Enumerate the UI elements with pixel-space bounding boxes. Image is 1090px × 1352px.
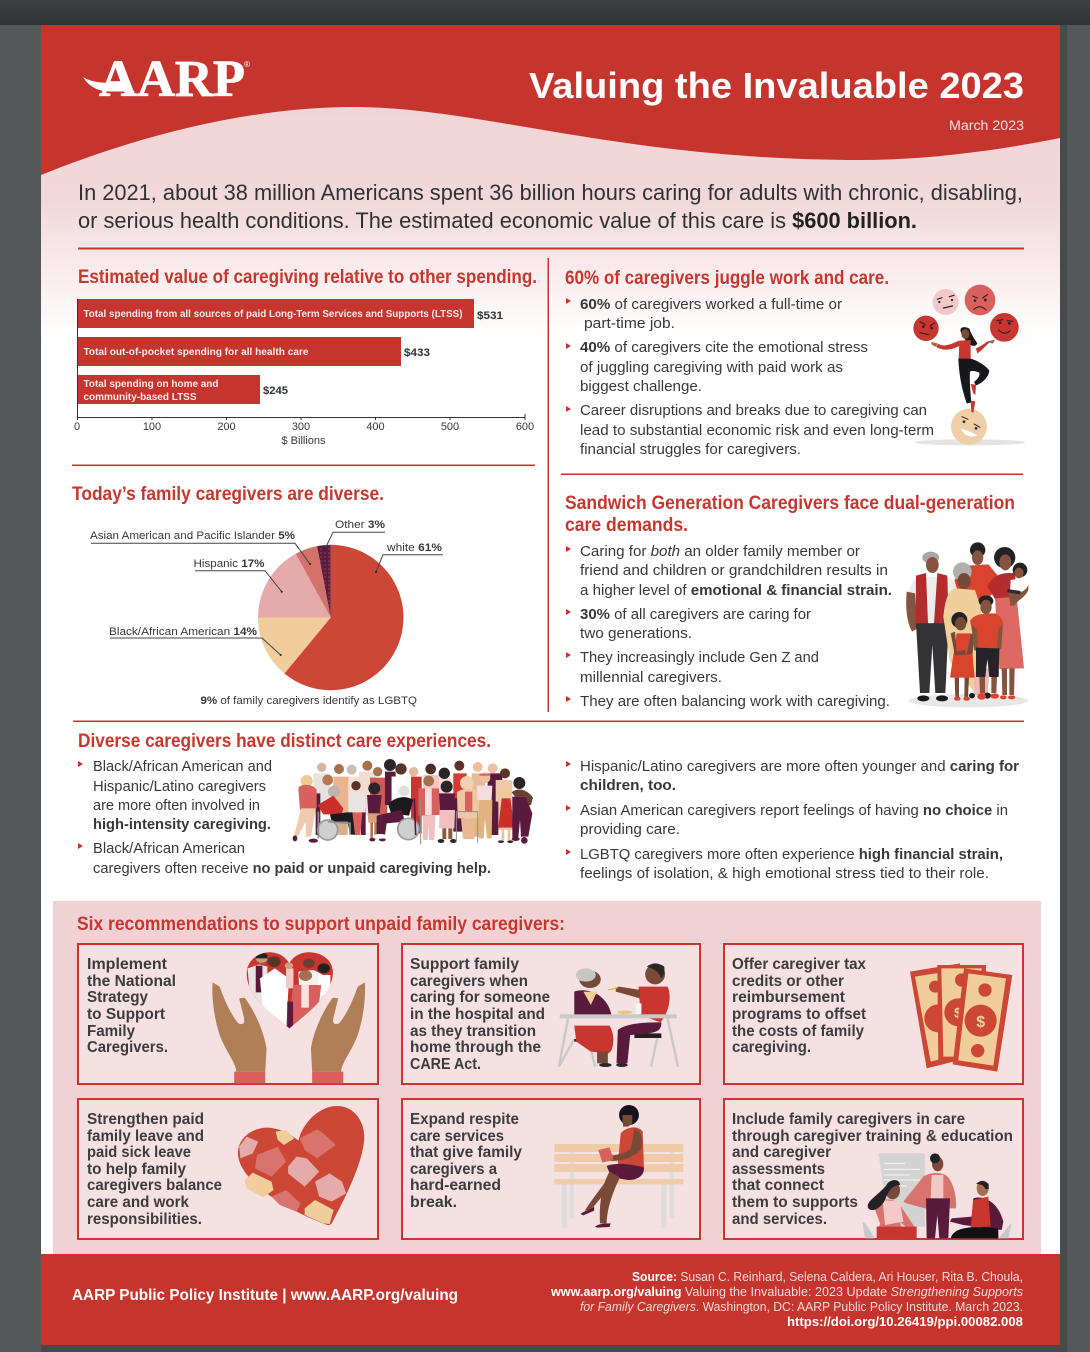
bar chart: $ Billions xyxy=(281,435,326,447)
bullets: sandwich generation: They increasingly include Gen Z and xyxy=(580,649,819,666)
footer xyxy=(41,1254,1060,1345)
card text: respite care: break. xyxy=(410,1194,457,1211)
heading: recommendations: Six recommendations to support unpaid family caregivers: xyxy=(77,914,565,935)
AARP logo: ® xyxy=(244,60,250,69)
bullets: right column: providing care. xyxy=(580,821,680,838)
pie labels: Hispanic 17% xyxy=(194,558,265,570)
heading: care experiences: Diverse caregivers have distinct care experiences. xyxy=(78,731,491,752)
card text: training and education: them to supports xyxy=(732,1194,858,1211)
LGBTQ note: 9% of family caregivers identify as LGBTQ xyxy=(200,695,417,707)
card text: training and education: and caregiver xyxy=(732,1144,831,1161)
bullets: sandwich generation: two generations. xyxy=(580,625,692,642)
card text: hospital transition: caring for someone xyxy=(410,989,550,1006)
card text: national strategy: Implement xyxy=(87,956,167,973)
intro text: In 2021, about 38 million Americans spent 36 billion hours caring for adults with chronic, disabling, xyxy=(78,180,1023,205)
heading: diversity: Today’s family caregivers are diverse. xyxy=(72,484,384,505)
bullets: sandwich generation: millennial caregivers. xyxy=(580,669,722,686)
intro text xyxy=(78,180,1023,233)
card text: national strategy: to Support xyxy=(87,1006,165,1023)
bullets: juggling: 60% of caregivers worked a full-time or xyxy=(580,296,842,313)
card text: hospital transition: in the hospital and xyxy=(410,1006,545,1023)
card text: hospital transition xyxy=(410,956,550,1073)
card: national strategy xyxy=(78,944,378,1084)
footer organisation and link: AARP Public Policy Institute | www.AARP.org/valuing xyxy=(72,1287,458,1304)
card text: paid leave: family leave and xyxy=(87,1128,204,1145)
card text: hospital transition: Support family xyxy=(410,956,519,973)
pie chart xyxy=(90,519,443,690)
card text: training and education: and services. xyxy=(732,1211,827,1228)
bullets: juggling: of juggling caregiving with paid work as xyxy=(580,359,843,376)
panel: sandwich generation xyxy=(565,493,1028,710)
illustration: caregiver feeding older woman at table xyxy=(559,963,678,1067)
card text: respite care: hard-earned xyxy=(410,1177,501,1194)
bullets: juggling xyxy=(566,296,934,458)
date: March 2023 xyxy=(949,118,1024,133)
bullets: right column xyxy=(566,758,1019,882)
bullets: right column: Asian American caregivers report feelings of having no choice in xyxy=(580,802,1008,819)
heading: sandwich generation: care demands. xyxy=(565,515,688,536)
card text: training and education: that connect xyxy=(732,1177,824,1194)
pie labels: Other 3% xyxy=(335,519,385,531)
card text: training and education: Include family caregivers in care xyxy=(732,1111,965,1128)
source citation: www.aarp.org/valuing Valuing the Invaluable: 2023 Update Strengthening Supports xyxy=(550,1285,1023,1299)
bullets: left column: Black/African American xyxy=(93,840,245,857)
bullets: sandwich generation: Caring for both an older family member or xyxy=(580,543,860,560)
bar chart: 500 xyxy=(441,421,459,433)
bar chart: $433 xyxy=(404,347,430,359)
bullets: left column: high-intensity caregiving. xyxy=(93,816,271,833)
card text: paid leave: Strengthen paid xyxy=(87,1111,204,1128)
intro text: or serious health conditions. The estimated economic value of this care is $600 billion. xyxy=(78,208,917,233)
bullets: sandwich generation: friend and children or grandchildren results in xyxy=(580,562,888,579)
illustration: woman juggling emotions xyxy=(913,285,1025,445)
panel: spending bar chart xyxy=(74,267,537,447)
bullets: juggling: financial struggles for caregivers. xyxy=(580,441,801,458)
source citation: Source: Susan C. Reinhard, Selena Caldera, Ari Houser, Rita B. Choula, xyxy=(632,1270,1023,1284)
panel: distinct care experiences xyxy=(78,731,1019,882)
bullets: juggling: 40% of caregivers cite the emotional stress xyxy=(580,339,868,356)
card text: training and education: through caregiver training & education xyxy=(732,1128,1013,1145)
bullets: juggling: lead to substantial economic risk and even long-term xyxy=(580,422,934,439)
card: tax credits xyxy=(724,944,1023,1084)
card text: paid leave: to help family xyxy=(87,1161,186,1178)
card text: hospital transition: CARE Act. xyxy=(410,1056,481,1073)
bar chart: 400 xyxy=(366,421,385,433)
bullets: left column: are more often involved in xyxy=(93,797,260,814)
illustration: hands holding heart of people xyxy=(212,950,365,1083)
bullets: sandwich generation: 30% of all caregivers are caring for xyxy=(580,606,811,623)
bullets: juggling: Career disruptions and breaks due to caregiving can xyxy=(580,402,927,419)
card text: respite care: Expand respite xyxy=(410,1111,519,1128)
bullets: sandwich generation: They are often balancing work with caregiving. xyxy=(580,693,890,710)
card text: national strategy xyxy=(87,956,176,1056)
bullets: right column: feelings of isolation, & high emotional stress tied to their role. xyxy=(580,865,989,882)
card text: paid leave: paid sick leave xyxy=(87,1144,191,1161)
bar chart: 200 xyxy=(217,421,236,433)
card text: tax credits: Offer caregiver tax xyxy=(732,956,866,973)
illustration: banknotes: $ xyxy=(954,1005,962,1021)
bar chart: Total out-of-pocket spending for all health care xyxy=(84,347,309,358)
panel: diversity pie chart xyxy=(72,484,443,707)
card text: national strategy: Strategy xyxy=(87,989,148,1006)
bar chart: community-based LTSS xyxy=(84,392,197,403)
bullets: left column: Hispanic/Latino caregivers xyxy=(93,778,266,795)
pie labels: Black/African American 14% xyxy=(109,626,257,638)
bar chart: 600 xyxy=(516,421,534,433)
card text: paid leave: caregivers balance xyxy=(87,1177,222,1194)
card text: respite care: care services xyxy=(410,1128,504,1145)
card text: training and education xyxy=(732,1111,1013,1228)
card text: tax credits: reimbursement xyxy=(732,989,845,1006)
source citation: for Family Caregivers. Washington, DC: AARP Public Policy Institute. March 2023. xyxy=(580,1300,1023,1314)
card text: respite care xyxy=(410,1111,522,1211)
bar chart xyxy=(74,299,534,447)
card text: training and education: assessments xyxy=(732,1161,825,1178)
card text: hospital transition: caregivers when xyxy=(410,973,528,990)
bullets: juggling: part-time job. xyxy=(584,315,675,332)
panel: six recommendations xyxy=(53,901,1041,1254)
card text: national strategy: Family xyxy=(87,1023,135,1040)
bar chart: Total spending on home and xyxy=(84,379,218,390)
bar chart: $245 xyxy=(263,385,288,397)
source citation: https://doi.org/10.26419/ppi.00082.008 xyxy=(787,1315,1023,1329)
card text: tax credits xyxy=(732,956,866,1056)
illustration: banknotes xyxy=(910,963,1012,1072)
heading: sandwich generation xyxy=(565,493,1015,536)
panel: juggling work and care xyxy=(565,268,1025,458)
card: respite care xyxy=(402,1099,700,1239)
bar chart: 100 xyxy=(143,421,161,433)
card text: hospital transition: as they transition xyxy=(410,1023,536,1040)
bullets: right column: children, too. xyxy=(580,777,676,794)
illustration: woman reading on bench xyxy=(554,1105,683,1228)
bullets: juggling: biggest challenge. xyxy=(580,378,702,395)
heading: spending: Estimated value of caregiving relative to other spending. xyxy=(78,267,537,288)
bullets: right column: Hispanic/Latino caregivers are more often younger and caring for xyxy=(580,758,1019,775)
header banner xyxy=(41,25,1060,175)
card text: tax credits: credits or other xyxy=(732,973,844,990)
bullets: left column xyxy=(78,758,491,877)
bullets: right column: LGBTQ caregivers more often experience high financial strain, xyxy=(580,846,1003,863)
bullets: left column: caregivers often receive no paid or unpaid caregiving help. xyxy=(93,860,491,877)
bullets: left column: Black/African American and xyxy=(93,758,272,775)
pie labels: white 61% xyxy=(386,542,442,554)
card text: tax credits: programs to offset xyxy=(732,1006,866,1023)
card text: respite care: caregivers a xyxy=(410,1161,497,1178)
card text: respite care: that give family xyxy=(410,1144,522,1161)
bar chart: $531 xyxy=(477,310,503,322)
AARP logo: AARP xyxy=(99,51,245,108)
card text: national strategy: Caregivers. xyxy=(87,1039,168,1056)
card text: paid leave xyxy=(87,1111,222,1228)
heading: sandwich generation: Sandwich Generation Caregivers face dual-generation xyxy=(565,493,1015,514)
illustration: puzzle heart xyxy=(238,1106,364,1225)
illustration: crowd of diverse caregivers xyxy=(293,759,533,844)
card: hospital transition xyxy=(402,944,700,1084)
card text: tax credits: caregiving. xyxy=(732,1039,811,1056)
card: paid leave xyxy=(78,1099,378,1239)
source citation xyxy=(550,1270,1023,1329)
bar chart: 0 xyxy=(74,421,80,433)
card text: national strategy: the National xyxy=(87,973,176,990)
card text: tax credits: the costs of family xyxy=(732,1023,864,1040)
card: training and education xyxy=(724,1099,1023,1239)
card text: paid leave: responsibilities. xyxy=(87,1211,202,1228)
illustration: care team meeting xyxy=(862,1153,1012,1238)
heading: juggling: 60% of caregivers juggle work and care. xyxy=(565,268,889,289)
pie labels xyxy=(90,519,442,638)
title: Valuing the Invaluable 2023 xyxy=(529,65,1024,106)
bullets: sandwich generation xyxy=(566,543,892,710)
illustration: banknotes: $ xyxy=(976,1014,985,1031)
bar chart: 300 xyxy=(292,421,310,433)
bar chart: Total spending from all sources of paid Long-Term Services and Supports (LTSS) xyxy=(84,309,462,320)
pie labels: Asian American and Pacific Islander 5% xyxy=(90,530,295,542)
illustration: multigenerational family xyxy=(906,542,1028,707)
bullets: sandwich generation: a higher level of emotional & financial strain. xyxy=(580,582,892,599)
card text: paid leave: care and work xyxy=(87,1194,189,1211)
card text: hospital transition: home through the xyxy=(410,1039,541,1056)
